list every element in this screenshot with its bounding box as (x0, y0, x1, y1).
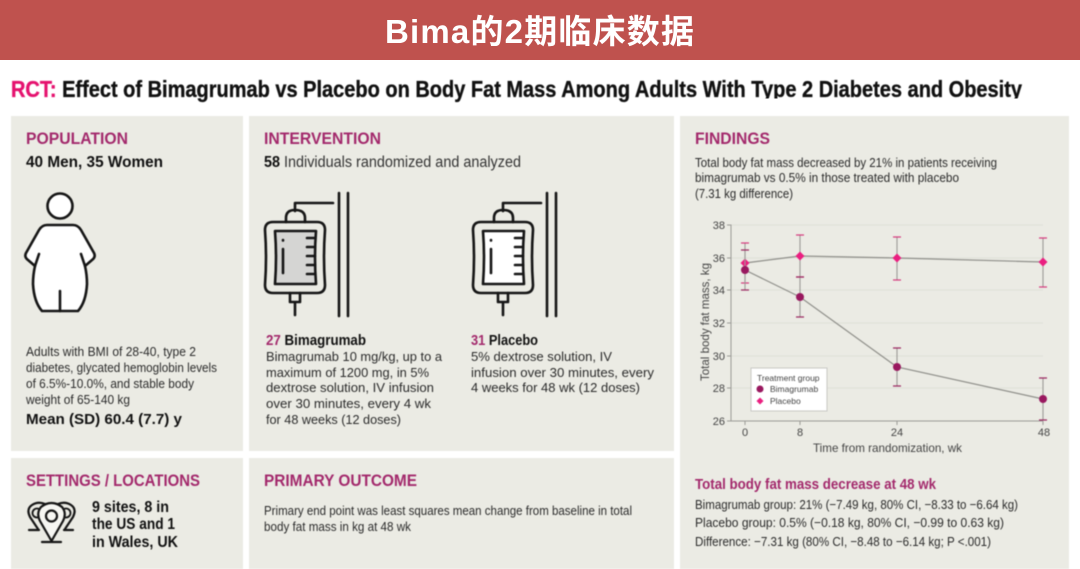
findings summary: bimagrumab vs 0.5% in those treated with placebo (695, 170, 959, 185)
primary outcome text: Primary end point was least squares mean change from baseline in total (264, 503, 632, 518)
mean age: Mean (SD) 60.4 (7.7) y (26, 411, 183, 428)
y-axis tick labels: 32 (713, 318, 725, 330)
y-axis title: Total body fat mass, kg (698, 263, 712, 381)
placebo arm text (471, 333, 654, 395)
panel: intervention (249, 116, 674, 451)
population description: diabetes, glycated hemoglobin levels (26, 360, 217, 375)
y-axis tick labels: 38 (713, 220, 725, 232)
locations text (92, 499, 179, 551)
y-axis tick labels: 26 (713, 416, 725, 428)
bimagrumab arm text: Bimagrumab 10 mg/kg, up to a (266, 349, 443, 364)
panel: population (11, 116, 243, 451)
findings summary (695, 155, 997, 201)
heading: findings: FINDINGS (695, 130, 770, 148)
icon: IV bag placebo (473, 193, 556, 316)
header banner (0, 0, 1080, 60)
line chart: total body fat mass (698, 220, 1050, 455)
bimagrumab arm text: dextrose solution, IV infusion (266, 380, 434, 395)
x-axis tick labels: 24 (891, 427, 903, 439)
series: placebo (740, 235, 1048, 287)
heading: primary outcome: PRIMARY OUTCOME (264, 472, 417, 490)
x-axis title: Time from randomization, wk (813, 441, 963, 455)
subheading: decrease at 48 weeks: Total body fat mass decrease at 48 wk (695, 477, 937, 493)
series: bimagrumab (741, 250, 1047, 420)
placebo arm text: 5% dextrose solution, IV (471, 349, 612, 364)
placebo arm text: 31 Placebo (471, 333, 538, 349)
randomized count: 58 Individuals randomized and analyzed (264, 154, 521, 171)
bimagrumab arm text: 27 Bimagrumab (266, 333, 366, 349)
x-axis tick labels: 0 (742, 427, 748, 439)
panel: primary outcome (249, 458, 674, 569)
heading: population: POPULATION (26, 130, 128, 148)
findings results: Difference: −7.31 kg (80% CI, −8.48 to −6.14 kg; P <.001) (695, 534, 991, 549)
icon: map pins (28, 503, 75, 542)
x-axis tick labels (742, 427, 1050, 439)
panel: findings (680, 116, 1069, 569)
legend: Placebo (770, 396, 801, 406)
primary outcome text (264, 503, 632, 534)
findings summary: Total body fat mass decreased by 21% in patients receiving (695, 155, 997, 170)
findings summary: (7.31 kg difference) (695, 186, 793, 201)
bimagrumab arm text: over 30 minutes, every 4 wk (266, 396, 431, 411)
legend (751, 368, 827, 411)
y-axis tick labels: 30 (713, 351, 725, 363)
y-axis tick labels: 28 (713, 383, 725, 395)
locations text: 9 sites, 8 in (92, 499, 169, 516)
findings results: Bimagrumab group: 21% (−7.49 kg, 80% CI, −8.33 to −6.64 kg) (695, 497, 1018, 512)
population description: of 6.5%-10.0%, and stable body (26, 376, 194, 391)
heading: intervention: INTERVENTION (264, 130, 381, 148)
bimagrumab arm text: maximum of 1200 mg, in 5% (266, 365, 429, 380)
legend: Treatment group (757, 373, 820, 383)
population description: weight of 65-140 kg (25, 392, 130, 407)
y-axis tick labels: 36 (713, 253, 725, 265)
population count: 40 Men, 35 Women (26, 154, 163, 171)
population description: Adults with BMI of 28-40, type 2 (26, 344, 196, 359)
placebo arm text: infusion over 30 minutes, every (471, 365, 654, 380)
icon: person (25, 194, 95, 311)
y-axis tick labels: 34 (713, 285, 725, 297)
population description (25, 344, 217, 407)
findings results: Placebo group: 0.5% (−0.18 kg, 80% CI, −0.99 to 0.63 kg) (695, 515, 1004, 530)
placebo arm text: 4 weeks for 48 wk (12 doses) (471, 380, 640, 395)
bimagrumab arm text: for 48 weeks (12 doses) (266, 412, 401, 427)
x-axis tick labels: 8 (797, 427, 803, 439)
heading: settings: SETTINGS / LOCATIONS (26, 472, 200, 490)
grid lines and axes (727, 225, 1043, 425)
findings results (695, 497, 1018, 549)
bimagrumab arm text (266, 333, 443, 427)
x-axis tick labels: 48 (1038, 427, 1050, 439)
legend: Bimagrumab (770, 384, 818, 394)
panel: settings and locations (11, 458, 243, 569)
y-axis tick labels (713, 220, 725, 428)
header banner: Bima的2期临床数据 (385, 13, 694, 50)
locations text: the US and 1 (92, 516, 175, 533)
locations text: in Wales, UK (92, 534, 179, 551)
icon: IV bag bimagrumab (265, 193, 348, 316)
primary outcome text: body fat mass in kg at 48 wk (264, 519, 411, 534)
